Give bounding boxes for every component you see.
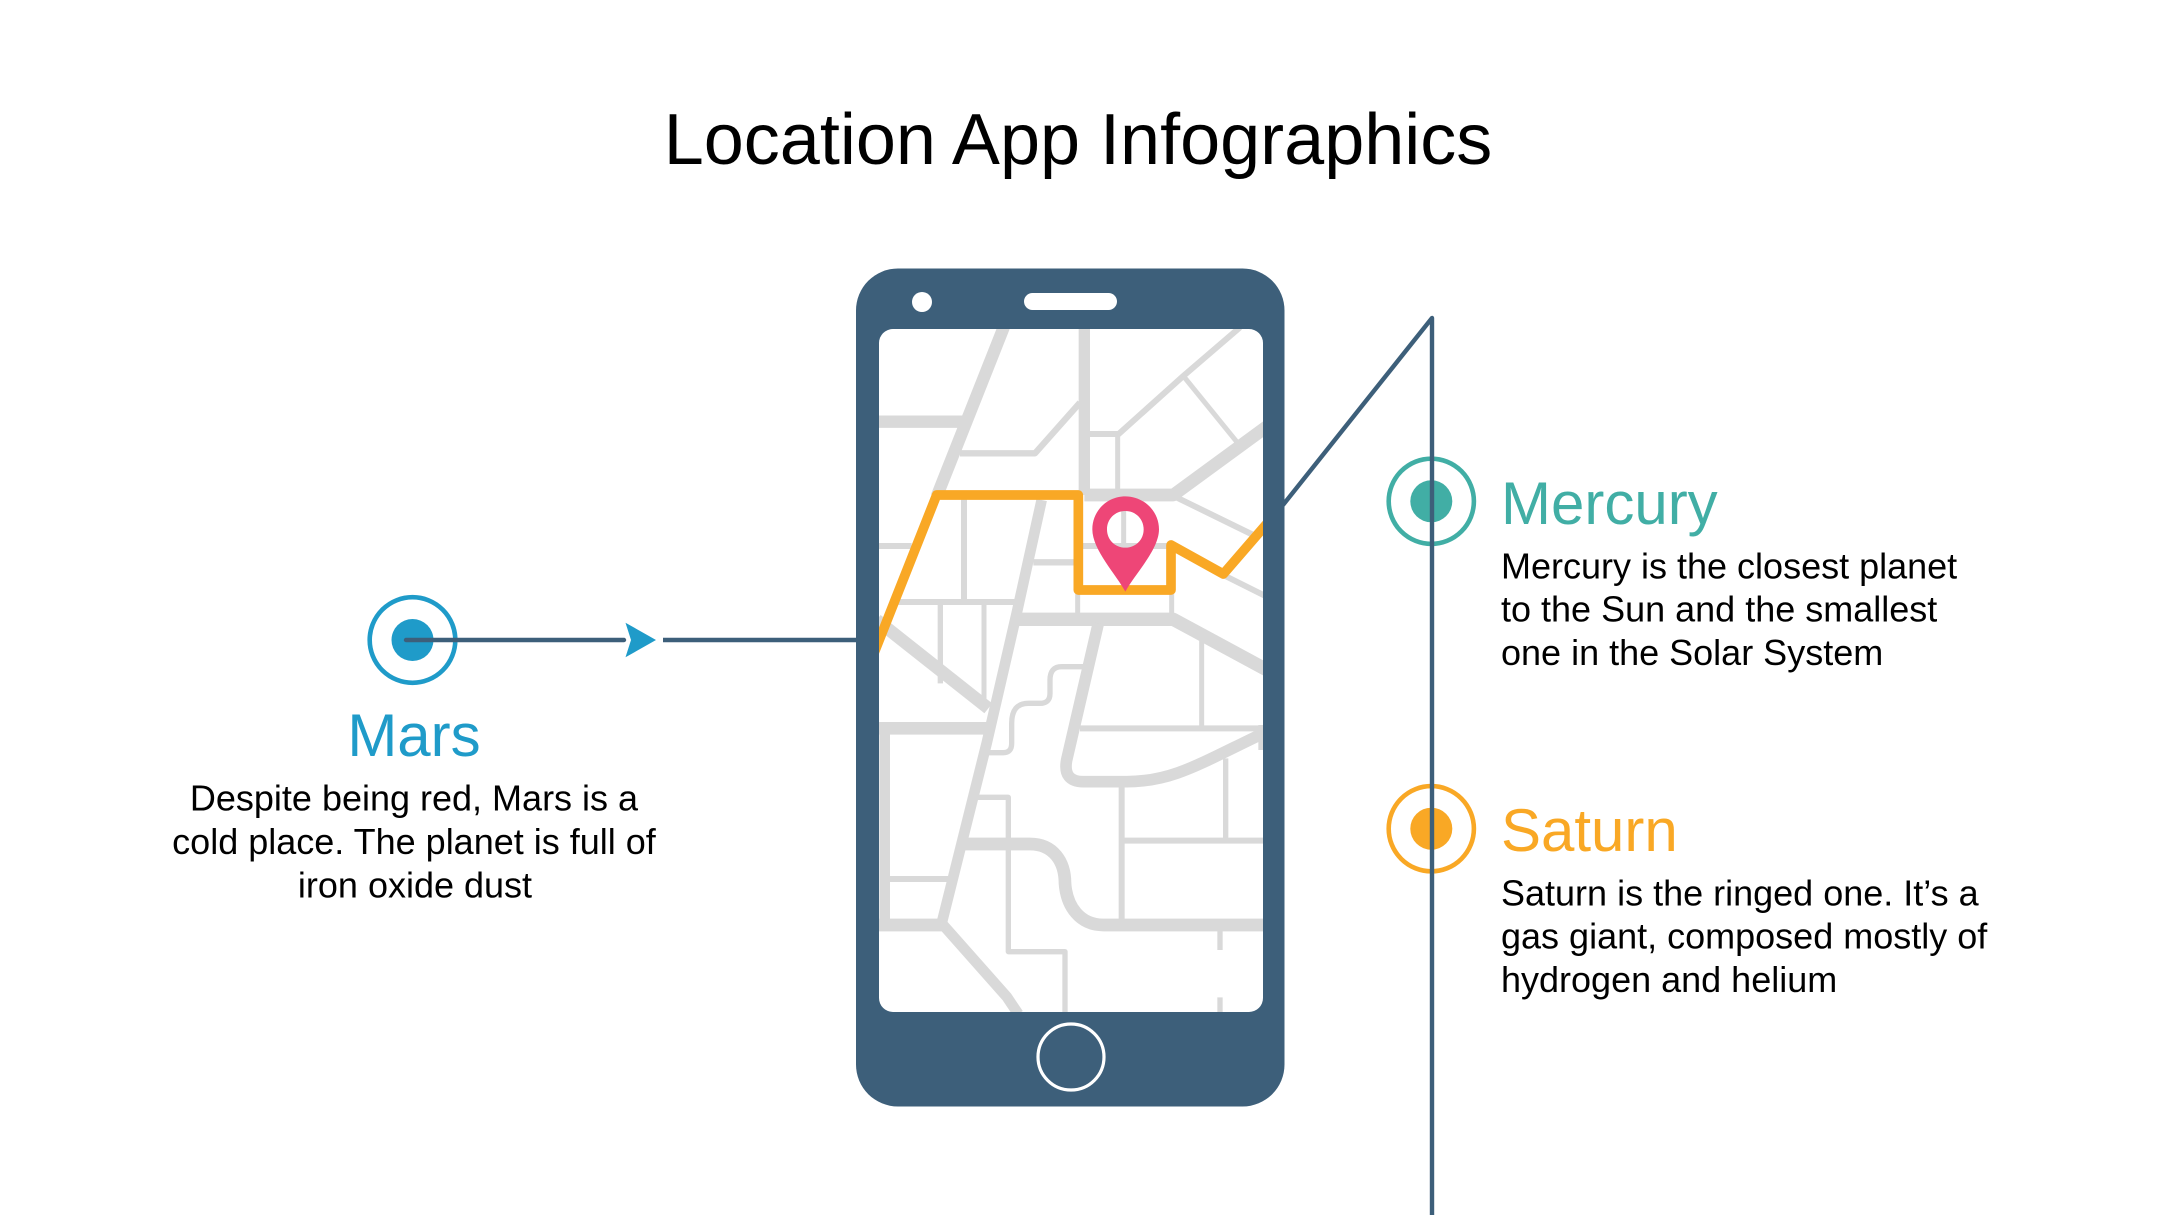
panel: Mercury bbox=[1389, 459, 1967, 673]
icon: home button bbox=[1038, 1024, 1104, 1090]
phone bbox=[856, 268, 1284, 1106]
panel: Mars bbox=[172, 597, 858, 905]
route line bbox=[870, 495, 1270, 663]
text block: Mars description: cold place. The planet is full of bbox=[172, 821, 657, 862]
text block: Mars description: iron oxide dust bbox=[298, 864, 532, 905]
text block: Mercury description: Mercury is the closest planet bbox=[1501, 545, 1957, 586]
arrow: Mars connector to phone bbox=[406, 623, 858, 657]
heading: Saturn: Saturn bbox=[1501, 797, 1678, 864]
text block: Mars description: Despite being red, Mars is a bbox=[190, 778, 639, 819]
heading: Mercury: Mercury bbox=[1501, 470, 1718, 537]
title: Location App Infographics bbox=[664, 100, 1492, 180]
text block: Mercury description: one in the Solar System bbox=[1501, 632, 1883, 673]
map roads bbox=[877, 327, 1268, 1014]
arrow: phone connector line to Mercury and Saturn bbox=[1283, 318, 1432, 1215]
screen bbox=[879, 329, 1263, 1012]
panel: Saturn bbox=[1389, 786, 1997, 1000]
icon: Mars target marker bbox=[370, 597, 455, 683]
heading: Mars: Mars bbox=[347, 702, 481, 769]
text block: Saturn description: Saturn is the ringed one. It’s a bbox=[1501, 872, 1980, 913]
text block: Mercury description: to the Sun and the smallest bbox=[1501, 589, 1937, 630]
icon: Mercury target marker bbox=[1389, 459, 1474, 544]
phone body bbox=[856, 268, 1284, 1106]
icon: location pin bbox=[1092, 496, 1159, 592]
icon: Saturn target marker bbox=[1389, 786, 1474, 871]
text block: Saturn description: hydrogen and helium bbox=[1501, 959, 1837, 1000]
icon: speaker bbox=[1024, 293, 1117, 310]
map bbox=[870, 327, 1270, 1014]
text block: Saturn description: gas giant, composed mostly of bbox=[1501, 916, 1988, 957]
icon: camera bbox=[912, 292, 932, 312]
